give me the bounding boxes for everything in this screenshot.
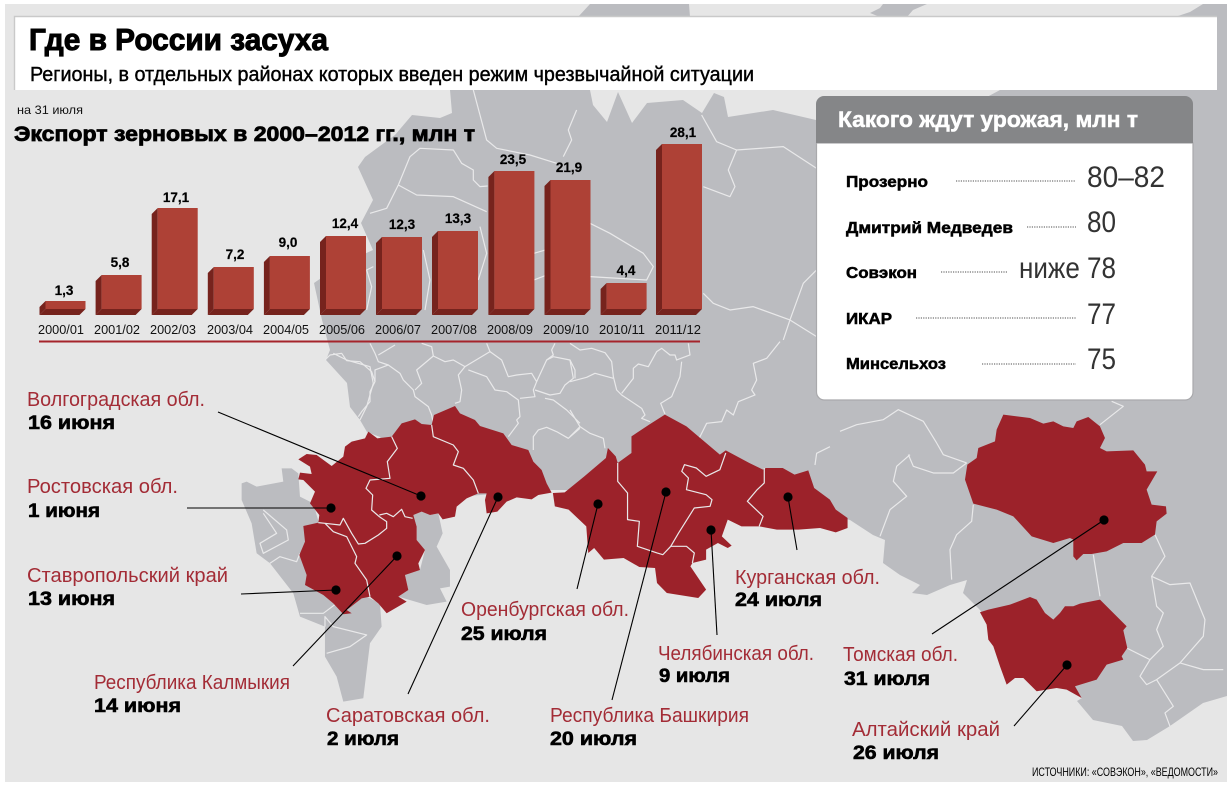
callout: Республика Калмыкия: Республика Калмыкия [94, 672, 290, 694]
row: Дмитрий Медведев: Дмитрий Медведев [846, 220, 1013, 237]
bar 2007/08: 2007/08 [431, 323, 477, 337]
bar 2001/02 [94, 255, 142, 337]
bar 2005/06 [319, 216, 366, 337]
bar 2008/09: 23,5 [500, 152, 527, 167]
bar 2004/05: 2004/05 [263, 323, 309, 337]
callout: Ставропольский край [27, 565, 341, 610]
callout: Оренбургская обл.: Оренбургская обл. [461, 599, 629, 621]
row: Минсельхоз [846, 343, 1116, 376]
bar 2003/04: 2003/04 [207, 323, 253, 337]
title: Где в России засуха [29, 22, 329, 57]
bar 2000/01: 2000/01 [38, 323, 84, 337]
callout: Оренбургская обл. [461, 499, 629, 645]
bar 2004/05: 9,0 [279, 235, 297, 250]
chart baseline [39, 340, 700, 342]
map: Tomsk region [965, 415, 1167, 560]
bar 2004/05 [263, 235, 310, 337]
bar 2001/02: 2001/02 [94, 323, 140, 337]
callout: Волгоградская обл.: 16 июня [28, 413, 115, 434]
row: Минсельхоз: Минсельхоз [846, 356, 946, 373]
bar 2011/12: 2011/12 [655, 323, 701, 337]
callout: Алтайский край: 26 июля [853, 743, 939, 764]
bar 2003/04: 7,2 [226, 247, 244, 262]
callout: Ставропольский край: Ставропольский край [27, 565, 228, 587]
bar 2002/03: 17,1 [163, 190, 190, 205]
callout: Курганская обл.: Курганская обл. [735, 567, 880, 589]
panel header [816, 96, 1193, 143]
callout: Томская обл.: 31 июля [844, 669, 930, 690]
bar 2009/10: 2009/10 [543, 323, 589, 337]
callout: Челябинская обл. [658, 525, 814, 687]
callout: Ставропольский край: 13 июня [28, 589, 115, 610]
row: Прозерно [846, 161, 1165, 194]
callout: Волгоградская обл. [27, 389, 426, 501]
callout: Республика Калмыкия: 14 июня [94, 696, 181, 717]
callout: Саратовская обл. [326, 492, 503, 750]
row: Дмитрий Медведев: 80 [1087, 206, 1116, 239]
callout: Ростовская обл.: 1 июня [28, 501, 100, 522]
bar 2010/11: 4,4 [617, 263, 636, 278]
bar 2011/12: 28,1 [670, 125, 697, 140]
callout: Челябинская обл.: Челябинская обл. [658, 643, 814, 665]
row: ИКАР: 77 [1087, 298, 1116, 331]
bar 2000/01 [38, 283, 86, 337]
header panel [14, 16, 1217, 90]
bar 2006/07: 2006/07 [375, 323, 421, 337]
bar 2007/08: 13,3 [445, 211, 472, 226]
bar 2005/06: 12,4 [332, 216, 359, 231]
date note: на 31 июля [17, 103, 83, 117]
callout: Томская обл.: Томская обл. [843, 644, 958, 666]
callout: Алтайский край: Алтайский край [852, 719, 1000, 741]
callout: Ростовская обл. [27, 476, 336, 522]
callout: Саратовская обл.: 2 июля [327, 729, 399, 750]
bar 2011/12 [655, 125, 702, 337]
row: ИКАР: ИКАР [846, 311, 892, 328]
callout: Республика Башкирия: 20 июля [550, 729, 637, 750]
callout: Ростовская обл.: Ростовская обл. [27, 476, 178, 498]
callout: Челябинская обл.: 9 июля [659, 666, 730, 687]
bar 2003/04 [207, 247, 254, 337]
bar chart: grain export [38, 125, 702, 342]
callout: Томская обл. [843, 515, 1109, 690]
callout: Волгоградская обл.: Волгоградская обл. [27, 389, 205, 411]
map: grey land with region borders [242, 4, 1227, 741]
bar 2009/10 [543, 160, 590, 337]
row: Совэкон: ниже 78 [1019, 252, 1116, 285]
bar 2008/09 [487, 152, 534, 337]
bar 2010/11 [599, 263, 647, 337]
row: Минсельхоз: 75 [1087, 343, 1116, 376]
callout: Республика Башкирия [550, 487, 749, 750]
callout: Оренбургская обл.: 25 июля [461, 624, 547, 645]
callout: Курганская обл.: 24 июля [735, 590, 822, 611]
panel header: Какого ждут урожая, млн т [838, 107, 1138, 132]
callout: Курганская обл. [735, 492, 880, 611]
bar 2007/08 [431, 211, 478, 337]
bar 2010/11: 2010/11 [599, 323, 645, 337]
callout: Республика Калмыкия [94, 551, 402, 717]
chart heading: Экспорт зерновых в 2000–2012 гг., млн т [14, 122, 475, 146]
bar 2009/10: 21,9 [556, 160, 582, 175]
bar 2006/07 [375, 217, 422, 337]
panel: harvest forecasts [816, 96, 1193, 400]
bar 2008/09: 2008/09 [487, 323, 533, 337]
map: western drought regions (Rostov, Volgograd, Stavropol, Kalmykia, Saratov) [298, 406, 552, 614]
callout: Саратовская обл.: Саратовская обл. [326, 705, 490, 727]
row: Прозерно: Прозерно [846, 174, 928, 191]
bar 2006/07: 12,3 [389, 217, 416, 232]
row: Совэкон [846, 252, 1116, 285]
bar 2000/01: 1,3 [55, 283, 74, 298]
callout: Республика Башкирия: Республика Башкирия [550, 705, 749, 727]
bar 2002/03 [150, 190, 198, 337]
bar 2001/02: 5,8 [111, 255, 130, 270]
bar 2005/06: 2005/06 [319, 323, 365, 337]
bar 2002/03: 2002/03 [150, 323, 196, 337]
callout: Алтайский край [852, 660, 1072, 764]
row: Совэкон: Совэкон [846, 265, 917, 282]
map: central drought regions (Orenburg, Bashkiria, Chelyabinsk, Kurgan) [553, 415, 848, 598]
row: Дмитрий Медведев [846, 206, 1116, 239]
map: Altai region [980, 597, 1127, 698]
subtitle: Регионы, в отдельных районах которых введен режим чрезвычайной ситуации [30, 64, 754, 86]
row: ИКАР [846, 298, 1116, 331]
row: Прозерно: 80–82 [1087, 161, 1165, 194]
